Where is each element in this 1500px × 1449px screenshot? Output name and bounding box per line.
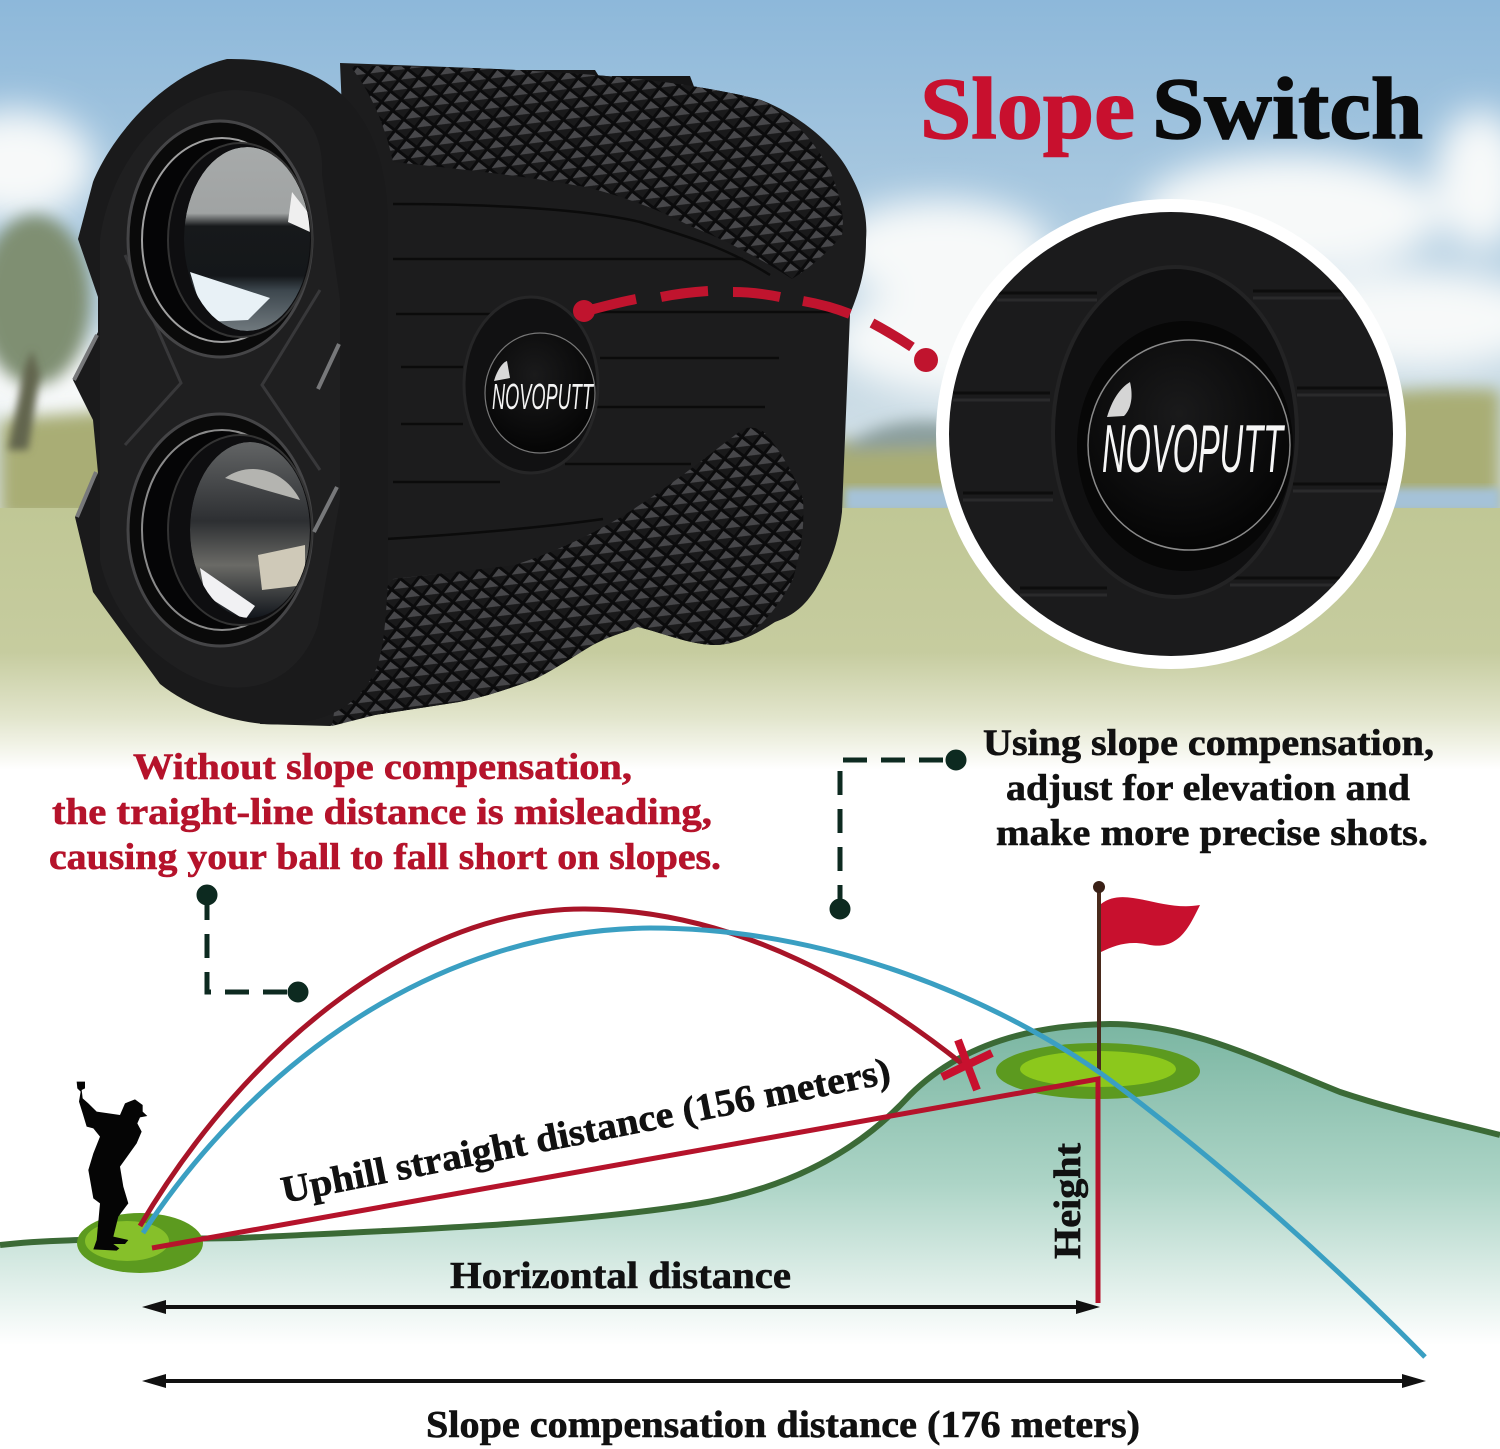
metal chevrons	[74, 335, 339, 532]
golfer silhouette	[77, 1082, 147, 1251]
black explanation text	[983, 723, 1434, 854]
red explanation text: causing your ball to fall short on slopes.	[49, 837, 721, 878]
top knurled grip	[350, 66, 843, 279]
arrow: slope compensation distance	[142, 1374, 1426, 1388]
red shot arc	[140, 909, 965, 1226]
arrow: horizontal distance	[142, 1300, 1100, 1314]
background: sky and golf course	[0, 0, 1500, 770]
title: Switch	[1152, 61, 1423, 158]
lower knurled grip	[332, 428, 803, 726]
front face	[73, 59, 388, 724]
label: horizontal distance: Horizontal distance	[450, 1255, 791, 1297]
X bridge lines	[125, 255, 320, 470]
dashed leader: without compensation	[199, 887, 306, 1000]
black explanation text: adjust for elevation and	[1006, 768, 1410, 809]
zoomed button circle	[936, 199, 1406, 669]
lens plate	[100, 90, 340, 688]
label: slope compensation distance: Slope compensation distance (176 meters)	[426, 1404, 1140, 1446]
red explanation text	[49, 747, 721, 878]
logo leaf	[1107, 382, 1132, 417]
dashed leader: with compensation	[832, 752, 964, 917]
logo button	[464, 297, 598, 473]
blue shot arc	[143, 928, 1425, 1357]
lower lens	[128, 414, 312, 646]
landing X marker	[942, 1040, 992, 1090]
title: Slope	[920, 61, 1135, 158]
black explanation text: Using slope compensation,	[983, 723, 1434, 764]
top buttons	[512, 70, 696, 92]
red explanation text: the traight-line distance is misleading,	[52, 792, 712, 833]
body grooves	[386, 204, 849, 539]
red explanation text: Without slope compensation,	[133, 747, 632, 788]
button housing: NOVOPUTT	[1102, 411, 1285, 487]
label: height: Height	[1047, 1143, 1089, 1259]
flag	[1093, 881, 1200, 1072]
rangefinder product	[73, 59, 866, 726]
green at hole	[996, 1043, 1200, 1099]
logo button: NOVOPUTT	[492, 376, 595, 417]
label: uphill straight distance: Uphill straight distance (156 meters)	[278, 1050, 894, 1212]
title	[920, 61, 1423, 158]
upper lens	[128, 121, 312, 357]
terrain hill	[0, 1024, 1500, 1345]
black explanation text: make more precise shots.	[996, 813, 1428, 854]
rangefinder body	[260, 63, 866, 726]
tee green	[77, 1213, 203, 1273]
button housing	[1053, 267, 1297, 597]
uphill straight line and height	[152, 1079, 1098, 1303]
red dashed connector	[573, 291, 938, 372]
